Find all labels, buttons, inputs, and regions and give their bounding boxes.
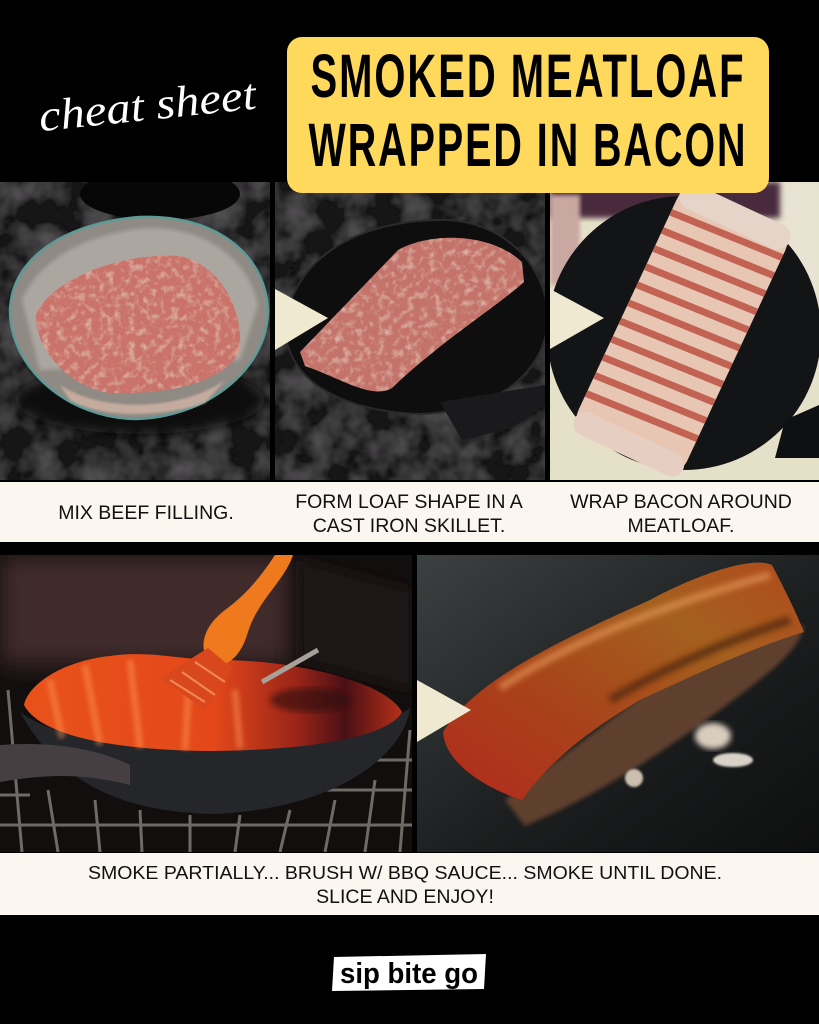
caption band: row one: CAST IRON SKILLET. xyxy=(313,515,505,537)
title banner xyxy=(287,37,769,193)
caption band: row one xyxy=(0,482,819,542)
photo: bacon wrapped loaf xyxy=(547,180,819,480)
arrow marker 2 xyxy=(550,289,604,349)
photo: sliced meatloaf xyxy=(417,555,819,852)
cheat sheet script heading: cheat sheet xyxy=(36,70,260,141)
caption band: row two: SLICE AND ENJOY! xyxy=(316,886,494,908)
glass bowl xyxy=(10,217,268,419)
bacon glazed crust xyxy=(443,563,804,800)
skillet xyxy=(20,708,410,814)
bacon loaf xyxy=(569,180,795,480)
caption band: row two: SMOKE PARTIALLY... BRUSH W/ BBQ SAUCE... SMOKE UNTIL DONE. xyxy=(88,862,722,883)
caption band: row one: MIX BEEF FILLING. xyxy=(58,502,234,524)
photo: beef filling in glass bowl xyxy=(0,168,270,480)
photo: brushing sauce on the smoker grill xyxy=(0,555,412,852)
caption band: row two xyxy=(0,853,819,915)
ground beef xyxy=(36,256,240,393)
caption band: row one: WRAP BACON AROUND xyxy=(570,491,792,513)
arrow marker 1 xyxy=(275,289,328,350)
caption band: row one: FORM LOAF SHAPE IN A xyxy=(295,491,523,513)
orange basting brush xyxy=(160,555,293,710)
arrow marker 3 xyxy=(417,680,471,742)
logo: sip bite go: sip bite go xyxy=(340,958,478,990)
meat cut face xyxy=(505,625,804,826)
caption band: row one: MEATLOAF. xyxy=(628,515,734,537)
formed meat loaf xyxy=(300,238,524,391)
photo: loaf in cast iron skillet xyxy=(275,182,548,480)
sauced loaf xyxy=(24,654,402,751)
